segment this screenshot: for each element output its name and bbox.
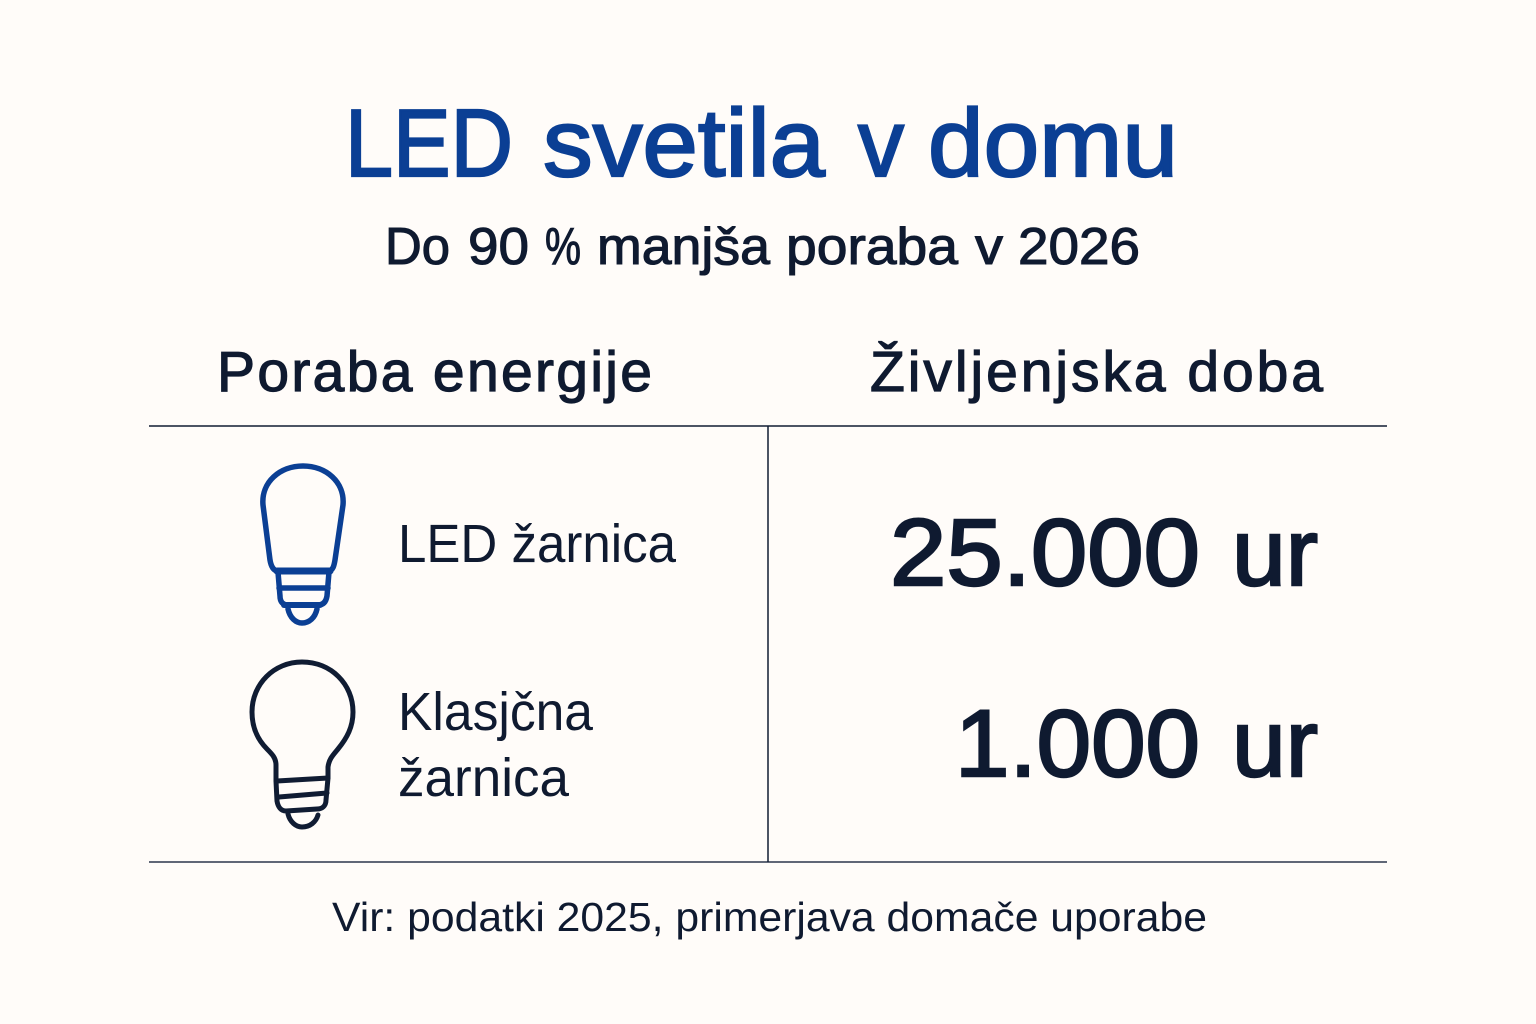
- icon: LED bulb: [263, 466, 343, 623]
- value: LED lifespan: 25.000: [890, 500, 1200, 606]
- label: classic bulb: žarnica: [398, 748, 570, 808]
- value: LED lifespan: [890, 500, 1318, 606]
- title: svetila: [543, 90, 826, 197]
- subtitle: poraba: [786, 218, 958, 276]
- subtitle: 2026: [1018, 218, 1140, 276]
- title: domu: [928, 90, 1178, 197]
- subtitle: Do: [385, 218, 450, 276]
- value: classic lifespan: [955, 691, 1318, 797]
- label: LED bulb: LED žarnica: [398, 514, 677, 574]
- label: classic bulb: Klasjčna: [398, 682, 594, 742]
- subtitle: manjša: [597, 218, 770, 276]
- icon: classic bulb: [252, 662, 353, 827]
- subtitle: v: [975, 218, 1003, 276]
- subtitle: 90: [468, 218, 529, 276]
- label: classic bulb: [398, 682, 594, 808]
- column heading: lifespan: Življenjska doba: [870, 340, 1323, 404]
- value: classic lifespan: ur: [1232, 691, 1318, 797]
- source note: Vir: podatki 2025, primerjava domače uporabe: [332, 894, 1207, 940]
- value: LED lifespan: ur: [1232, 500, 1318, 606]
- subtitle: %: [545, 218, 581, 276]
- title: [345, 90, 1178, 197]
- title: v: [858, 90, 904, 197]
- subtitle: [385, 218, 1140, 276]
- value: classic lifespan: 1.000: [955, 691, 1200, 797]
- title: LED: [345, 90, 513, 197]
- column heading: energy use: Poraba energije: [217, 340, 652, 404]
